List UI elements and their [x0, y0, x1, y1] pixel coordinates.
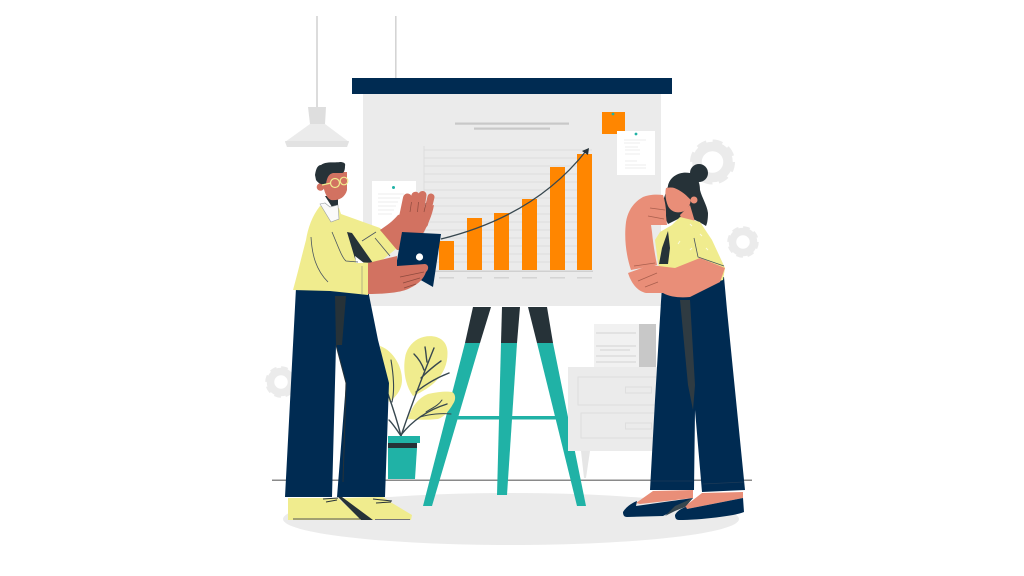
board top bar: [352, 78, 672, 94]
man neck and head: [315, 162, 348, 207]
woman face: [665, 174, 698, 224]
woman shoes: [623, 490, 744, 520]
board hanging cord: [395, 16, 397, 78]
tablet: [396, 232, 441, 287]
floor line: [272, 480, 752, 481]
plant in pot: [380, 336, 455, 479]
icon: hanging lamp: [285, 16, 349, 147]
man shoes: [288, 497, 412, 520]
icon: small gear left: [267, 368, 295, 396]
ground ellipse: [283, 493, 739, 545]
woman raised arm: [625, 195, 666, 270]
icon: large gear: [692, 142, 732, 182]
person: man presenting: [285, 162, 441, 520]
woman hand at chin: [648, 205, 667, 225]
trend arrow: [441, 148, 589, 239]
man shirt: [293, 203, 397, 295]
person: woman thinking: [623, 164, 745, 520]
man lower hand: [368, 256, 428, 294]
panel: presentation board: [363, 94, 661, 306]
woman trousers: [650, 277, 745, 492]
drawer cabinet with paper stack: [568, 324, 660, 478]
easel: [423, 307, 586, 506]
woman hair back and bun: [660, 164, 708, 226]
man trousers: [285, 288, 389, 497]
note: left paper: [372, 181, 416, 231]
woman forearm and hand: [628, 258, 725, 297]
man raised hand: [380, 195, 434, 250]
icon: small gear right: [729, 228, 757, 256]
bar chart: [424, 146, 593, 279]
woman shirt: [655, 217, 725, 290]
board title lines: [455, 122, 569, 130]
sticky note: orange: [602, 112, 625, 134]
note: right paper: [617, 131, 655, 175]
